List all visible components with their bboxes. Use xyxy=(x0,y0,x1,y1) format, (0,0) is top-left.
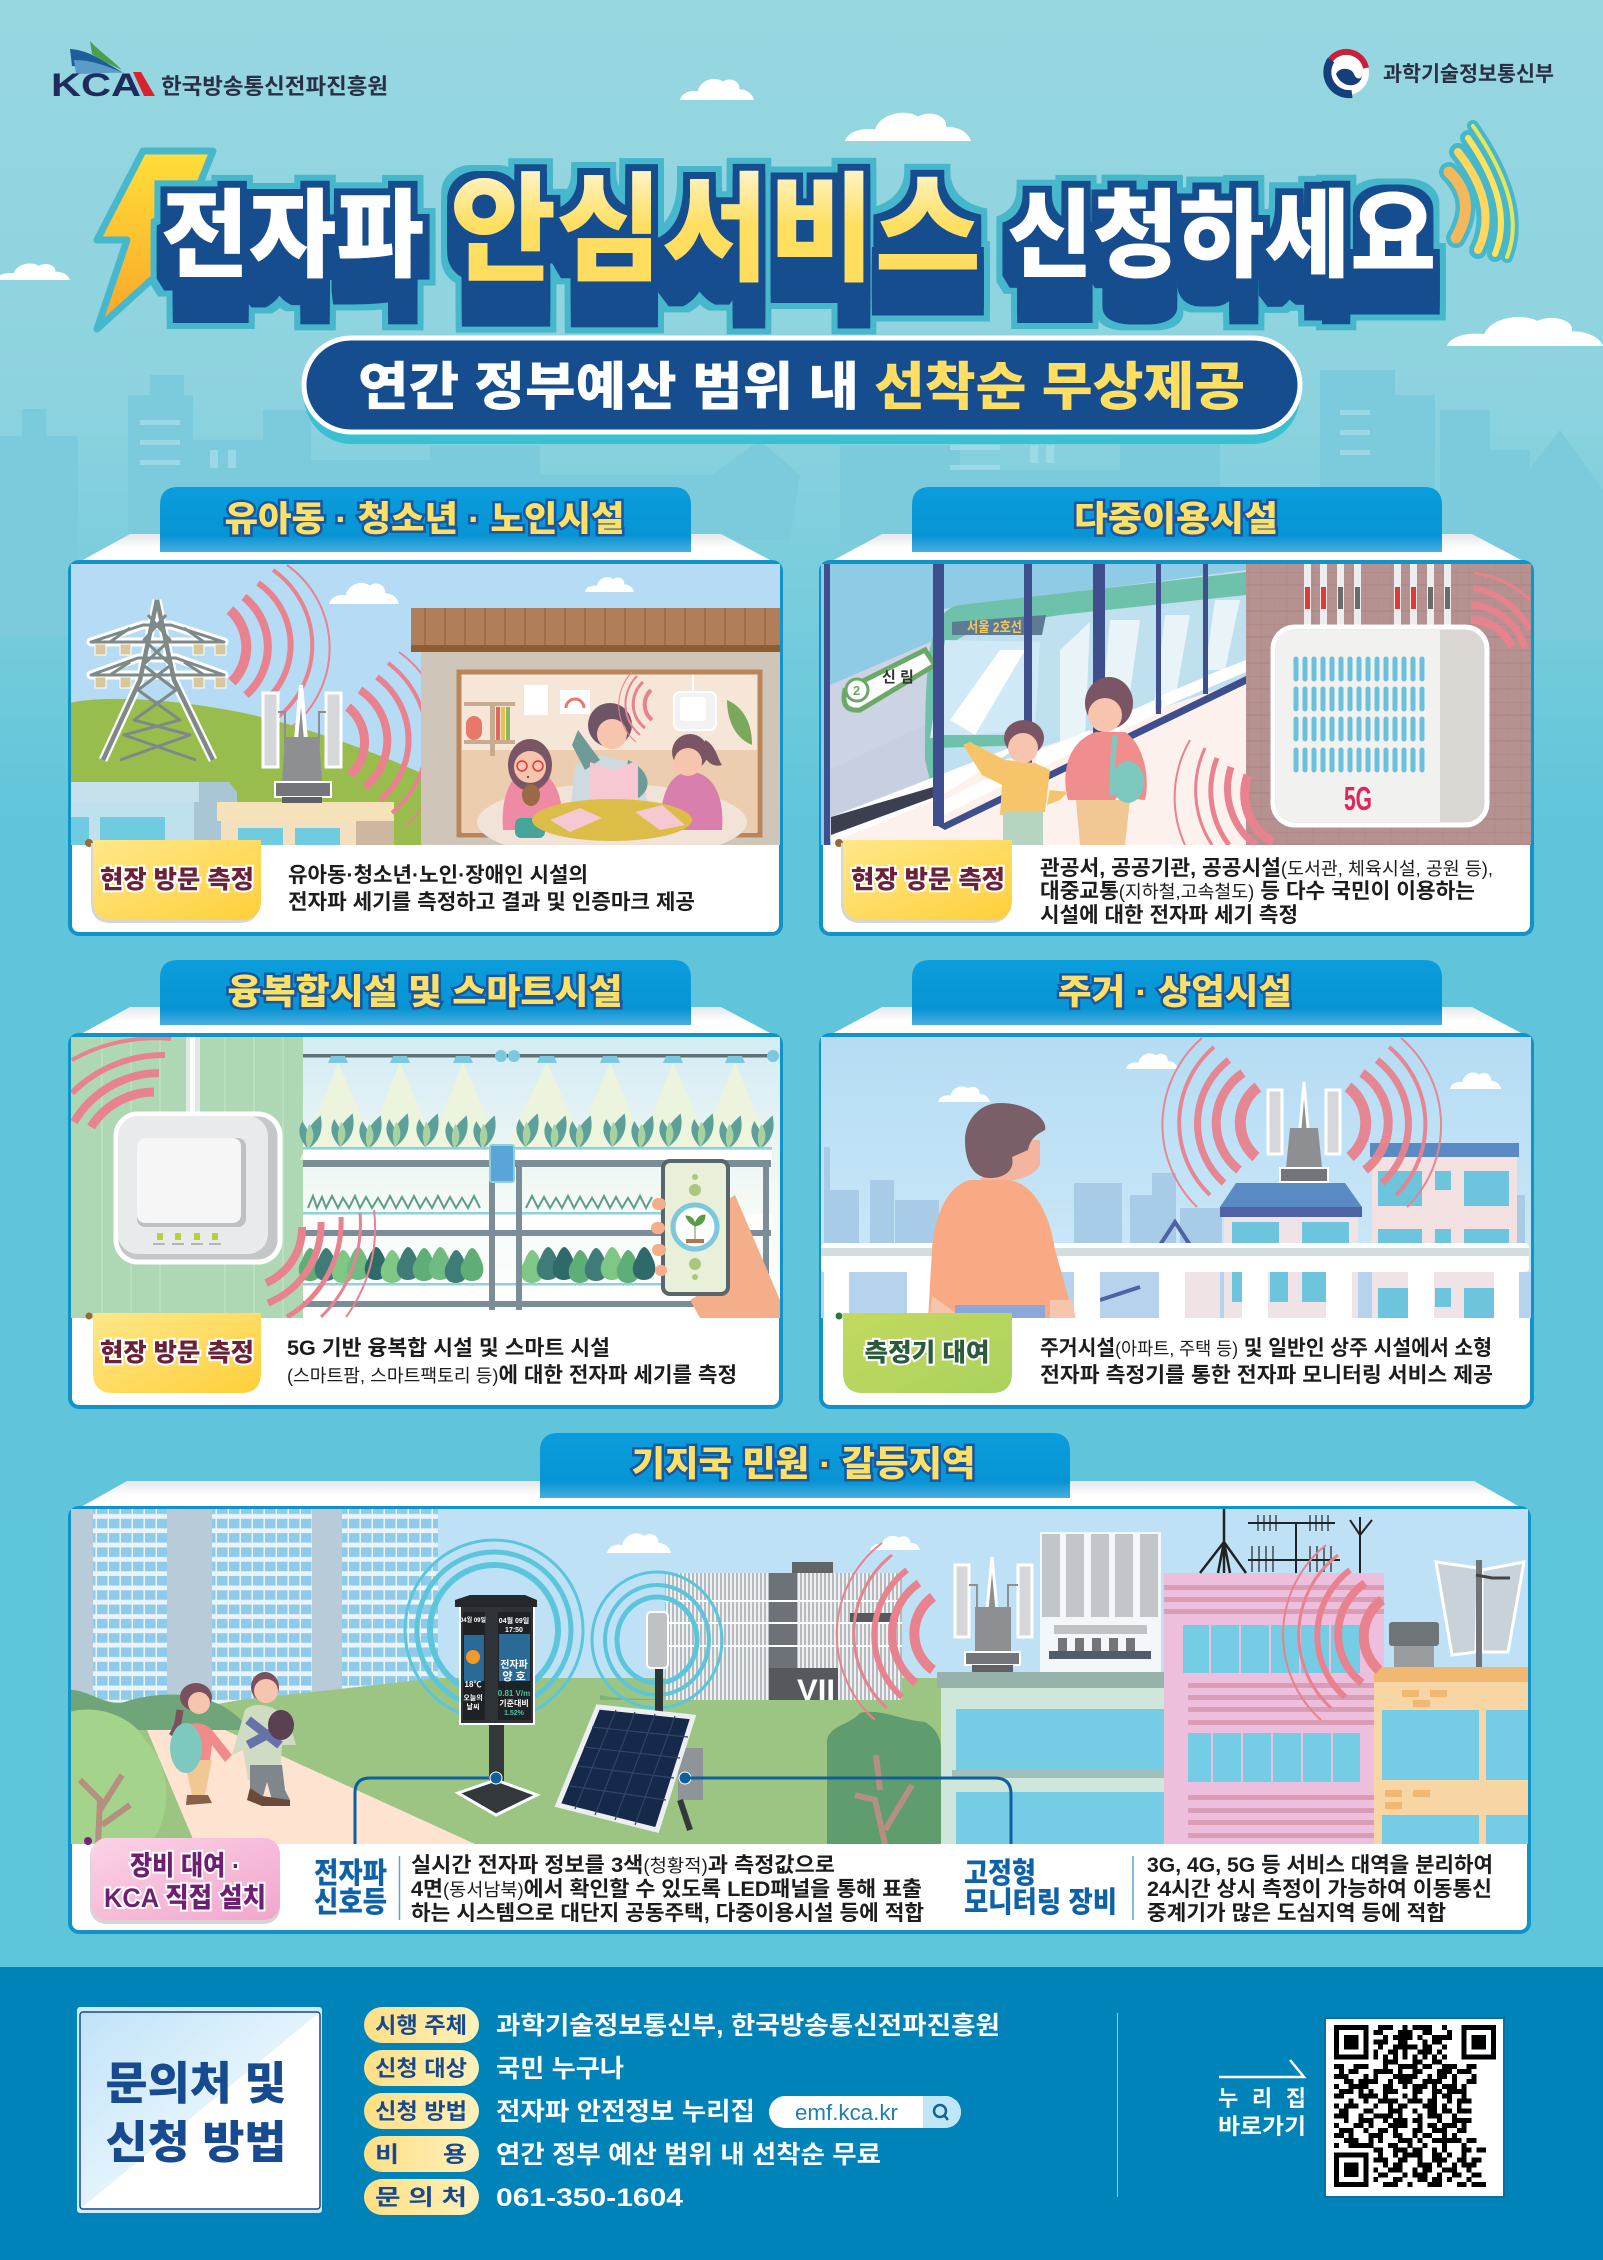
EMF signal light: 18℃ xyxy=(465,1680,481,1689)
EMF signal light: 기준대비 xyxy=(499,1698,529,1708)
path xyxy=(147,1730,475,1844)
train xyxy=(936,570,1246,825)
logo red accent xyxy=(133,72,155,96)
label: 현장 방문 측정: 현장 방문 측정 xyxy=(851,866,1005,894)
description: 전자파 신호등: 실시간 전자파 정보를 3색 (청황적)과 측정값으로 xyxy=(411,1854,835,1877)
link label xyxy=(1218,2086,1306,2139)
illustration: subway platform and 5G repeater: 서울 2호선 xyxy=(967,619,1022,635)
description: 주거시설(아파트, 주택 등) 및 일반인 상주 시설에서 소형 xyxy=(1040,1337,1492,1360)
panel top box xyxy=(832,1007,1523,1034)
logo swoosh xyxy=(70,41,124,74)
plants rows xyxy=(299,1113,774,1149)
EMF signal light: 1.52% xyxy=(504,1710,525,1717)
description: 전자파 신호등 xyxy=(411,1854,924,1925)
power tower xyxy=(91,600,226,760)
EMF signal light: 0.81 V/m xyxy=(498,1689,530,1698)
contact box: 신청 방법 xyxy=(106,2117,286,2168)
panel frame xyxy=(70,1508,1529,1932)
grow lights xyxy=(300,1050,779,1160)
title: 신청하세요 xyxy=(1007,183,1436,290)
5G repeater xyxy=(1273,627,1487,825)
illustration: subway platform and 5G repeater: 5G xyxy=(1344,780,1372,817)
row: 문의처: 061-350-1604 xyxy=(496,2184,683,2212)
row: 문의처: 문 의 처 xyxy=(375,2185,467,2210)
tab heading xyxy=(540,1433,1070,1498)
row: 신청 대상: 국민 누구나 xyxy=(496,2055,624,2083)
description: 전자파 신호등: 하는 시스템으로 대단지 공동주택, 다중이용시설 등에 적합 xyxy=(411,1902,924,1925)
subtitle pill: 선착순 무상제공 xyxy=(874,359,1245,417)
device name: 고정형 모니터링 장비: 모니터링 장비 xyxy=(964,1886,1117,1919)
person xyxy=(928,1103,1076,1320)
panel: 다중이용시설 xyxy=(821,487,1532,934)
row: 신청 방법 xyxy=(364,2093,961,2129)
description: 관공서, 공공기관, 공공시설 (도서관, 체육시설, 공원 등), xyxy=(1040,857,1493,880)
illustration: subway platform and 5G repeater: 신 림 xyxy=(882,669,914,686)
panel frame xyxy=(70,562,781,934)
description: 대중교통(지하철,고속철도) 등 다수 국민이 이용하는 xyxy=(1040,880,1475,903)
description xyxy=(288,864,695,914)
icon: lightning bolt xyxy=(97,151,213,329)
logo: KCA xyxy=(51,41,388,103)
device name: 고정형 모니터링 장비: 고정형 xyxy=(964,1857,1036,1890)
description xyxy=(1040,1337,1493,1387)
link label: 바로가기 xyxy=(1218,2114,1306,2139)
railing xyxy=(821,1243,1529,1318)
illustration: subway platform and 5G repeater xyxy=(821,564,1531,845)
EMF signal light: 날씨 xyxy=(467,1702,479,1711)
row: 신청 방법: 신청 방법 xyxy=(375,2099,467,2124)
label: 장비 대여·KCA 직접 설치: KCA 직접 설치 xyxy=(104,1883,266,1913)
subtitle pill: 연간 정부예산 범위 내 xyxy=(358,359,859,417)
contact box xyxy=(77,2007,322,2213)
description: 고정형 모니터링 장비: 3G, 4G, 5G 등 서비스 대역을 분리하여 xyxy=(1147,1854,1493,1877)
EMF signal light: 04월 09일 xyxy=(460,1616,486,1624)
EMF signal light: 전자파 xyxy=(500,1659,528,1671)
search box xyxy=(769,2096,961,2128)
row: 신청 대상: 신청 대상 xyxy=(375,2056,467,2081)
device name: 전자파 신호등: 신호등 xyxy=(314,1886,387,1919)
illustration: balcony view of base station xyxy=(821,1037,1531,1320)
organisation name: 한국방송통신전파진흥원 xyxy=(161,74,388,99)
waves xyxy=(1175,573,1530,845)
logo: ministry xyxy=(1325,51,1554,95)
tab heading xyxy=(912,487,1442,552)
orange building xyxy=(1374,1667,1528,1844)
description: 시설에 대한 전자파 세기 측정 xyxy=(1040,904,1298,927)
description: 전자파 측정기를 통한 전자파 모니터링 서비스 제공 xyxy=(1040,1364,1493,1387)
row: 비용: 비 용 xyxy=(375,2142,467,2167)
label: 측정기 대여 xyxy=(836,1312,1012,1393)
children xyxy=(503,703,722,838)
router xyxy=(186,1037,200,1117)
mast and yagi antennas xyxy=(1200,1507,1372,1573)
balcony below rail xyxy=(821,1272,1531,1318)
skyline background xyxy=(0,370,1603,650)
description: 유아동·청소년·노인·장애인 시설의 xyxy=(288,864,588,887)
description: 고정형 모니터링 장비 xyxy=(1147,1854,1493,1925)
sensor xyxy=(490,1145,514,1182)
device name: 고정형 모니터링 장비 xyxy=(964,1857,1117,1919)
pink building xyxy=(1164,1573,1384,1844)
rooftop equipment xyxy=(1389,1560,1524,1667)
row: 시행 주체 xyxy=(364,2007,1000,2043)
glass building: VII xyxy=(797,1674,835,1707)
emblem xyxy=(1325,51,1369,95)
label: 현장 방문 측정 xyxy=(85,839,261,923)
panel frame xyxy=(70,1035,781,1407)
mother and child xyxy=(963,677,1147,845)
label: 현장 방문 측정 xyxy=(86,1312,261,1393)
icon: signal arcs xyxy=(1449,126,1513,257)
ground xyxy=(71,1678,1000,1844)
footer xyxy=(0,1967,1603,2260)
screen door posts xyxy=(824,564,1208,845)
row: 비용: 연간 정부 예산 범위 내 선착순 무료 xyxy=(496,2141,881,2169)
brick wall xyxy=(1246,564,1531,845)
title xyxy=(161,165,1436,297)
panel frame xyxy=(821,562,1532,934)
illustration: router and smart farm xyxy=(71,1037,780,1318)
description: 고정형 모니터링 장비: 중계기가 많은 도심지역 등에 적합 xyxy=(1147,1902,1446,1925)
tab heading: 유아동 · 청소년 · 노인시설 xyxy=(224,500,624,539)
antenna xyxy=(1268,1082,1340,1182)
glass building xyxy=(665,1562,902,1707)
green building xyxy=(937,1672,1190,1844)
description: 고정형 모니터링 장비: 24시간 상시 측정이 가능하여 이동통신 xyxy=(1147,1878,1492,1901)
tab heading: 기지국 민원 · 갈등지역 xyxy=(632,1445,976,1484)
device name: 전자파 신호등: 전자파 xyxy=(314,1857,387,1890)
row: 문의처 xyxy=(364,2179,683,2215)
EMF signal light: 양 호 xyxy=(502,1670,526,1683)
right tree xyxy=(827,1712,941,1844)
logo mark text: KCA xyxy=(51,67,141,103)
panel frame xyxy=(821,1035,1532,1407)
illustration: base station complaint area xyxy=(70,1507,1528,1844)
city silhouettes xyxy=(824,1147,1525,1245)
row: 신청 대상 xyxy=(364,2050,624,2086)
title: 안심서비스 xyxy=(450,165,981,297)
waves xyxy=(837,1543,1382,1720)
buildings xyxy=(194,782,237,840)
waves xyxy=(1162,1038,1441,1207)
row: 신청 방법: 전자파 안전정보 누리집 xyxy=(496,2098,755,2126)
subtitle pill xyxy=(304,338,1300,444)
EMF signal light: 04월 09일 xyxy=(499,1616,529,1625)
illustration: power tower, antenna and classroom xyxy=(69,564,781,860)
search box: emf.kca.kr xyxy=(795,2100,898,2125)
tab heading: 다중이용시설 xyxy=(1074,500,1278,539)
title: 전자파 xyxy=(161,183,424,290)
contact box: 문의처 및 xyxy=(106,2058,286,2109)
panel: 주거·상업시설 xyxy=(821,960,1532,1407)
row: 비용 xyxy=(364,2136,881,2172)
device name: 전자파 신호등 xyxy=(314,1857,387,1919)
link label: 누 리 집 xyxy=(1218,2086,1306,2111)
row: 시행 주체: 과학기술정보통신부, 한국방송통신전파진흥원 xyxy=(496,2012,1000,2040)
description: 전자파 신호등: 4면(동서남북)에서 확인할 수 있도록 LED패널을 통해 표출 xyxy=(411,1878,922,1901)
description: 전자파 세기를 측정하고 결과 및 인증마크 제공 xyxy=(288,891,695,914)
hand and phone xyxy=(690,1195,780,1318)
description: (스마트팜, 스마트팩토리 등)에 대한 전자파 세기를 측정 xyxy=(287,1364,737,1387)
illustration: subway platform and 5G repeater: 2 xyxy=(853,683,860,698)
waves xyxy=(72,1038,375,1317)
panel: 융복합시설 및 스마트시설 xyxy=(70,960,781,1407)
fixed monitoring device xyxy=(558,1612,703,1830)
antenna group on roof xyxy=(955,1532,1161,1672)
antenna xyxy=(263,685,341,803)
repeater cables xyxy=(1304,564,1451,630)
clouds xyxy=(0,79,1603,346)
right building xyxy=(1370,1143,1519,1157)
tab heading xyxy=(912,960,1442,1025)
panel top box xyxy=(81,1481,1520,1507)
shelves xyxy=(303,1147,772,1310)
floor xyxy=(831,680,1246,845)
table xyxy=(532,799,692,841)
panel top box xyxy=(81,1007,772,1034)
tab heading: 융복합시설 및 스마트시설 xyxy=(228,973,622,1012)
label: 현장 방문 측정: 현장 방문 측정 xyxy=(100,1339,254,1367)
tab heading xyxy=(160,487,691,552)
EMF signal light xyxy=(455,1595,537,1815)
classroom xyxy=(421,650,781,845)
description: 5G 기반 융복합 시설 및 스마트 시설 xyxy=(287,1337,610,1360)
family xyxy=(170,1672,296,1806)
QR code xyxy=(1325,2018,1504,2197)
waves xyxy=(230,565,330,727)
EMF signal light: 17:50 xyxy=(505,1627,523,1634)
tab heading xyxy=(160,960,691,1025)
label: 장비 대여·KCA 직접 설치: 장비 대여 · xyxy=(130,1851,240,1881)
row: 시행 주체: 시행 주체 xyxy=(375,2013,467,2038)
cyan signal rings xyxy=(405,1540,722,1720)
panel top box xyxy=(832,534,1523,561)
panel: 기지국 민원·갈등지역 xyxy=(70,1433,1529,1932)
panel top box xyxy=(81,534,772,561)
label: 현장 방문 측정: 현장 방문 측정 xyxy=(100,866,254,894)
connector lines xyxy=(355,1772,1011,1844)
label: 장비 대여·KCA 직접 설치 xyxy=(84,1837,280,1924)
description xyxy=(1040,857,1493,927)
label: 측정기 대여: 측정기 대여 xyxy=(864,1339,990,1367)
tab heading: 주거 · 상업시설 xyxy=(1058,973,1292,1012)
station sign xyxy=(844,650,935,710)
house xyxy=(1220,1183,1362,1207)
ministry name: 과학기술정보통신부 xyxy=(1383,63,1554,86)
left tree xyxy=(70,1709,166,1844)
arrow xyxy=(1219,2060,1304,2077)
panel: 유아동·청소년·노인시설 xyxy=(69,487,781,934)
apartment towers xyxy=(71,1509,438,1729)
description xyxy=(287,1337,737,1387)
EMF signal light: 오늘의 xyxy=(463,1693,483,1702)
router xyxy=(674,675,716,730)
label: 현장 방문 측정 xyxy=(835,839,1012,923)
